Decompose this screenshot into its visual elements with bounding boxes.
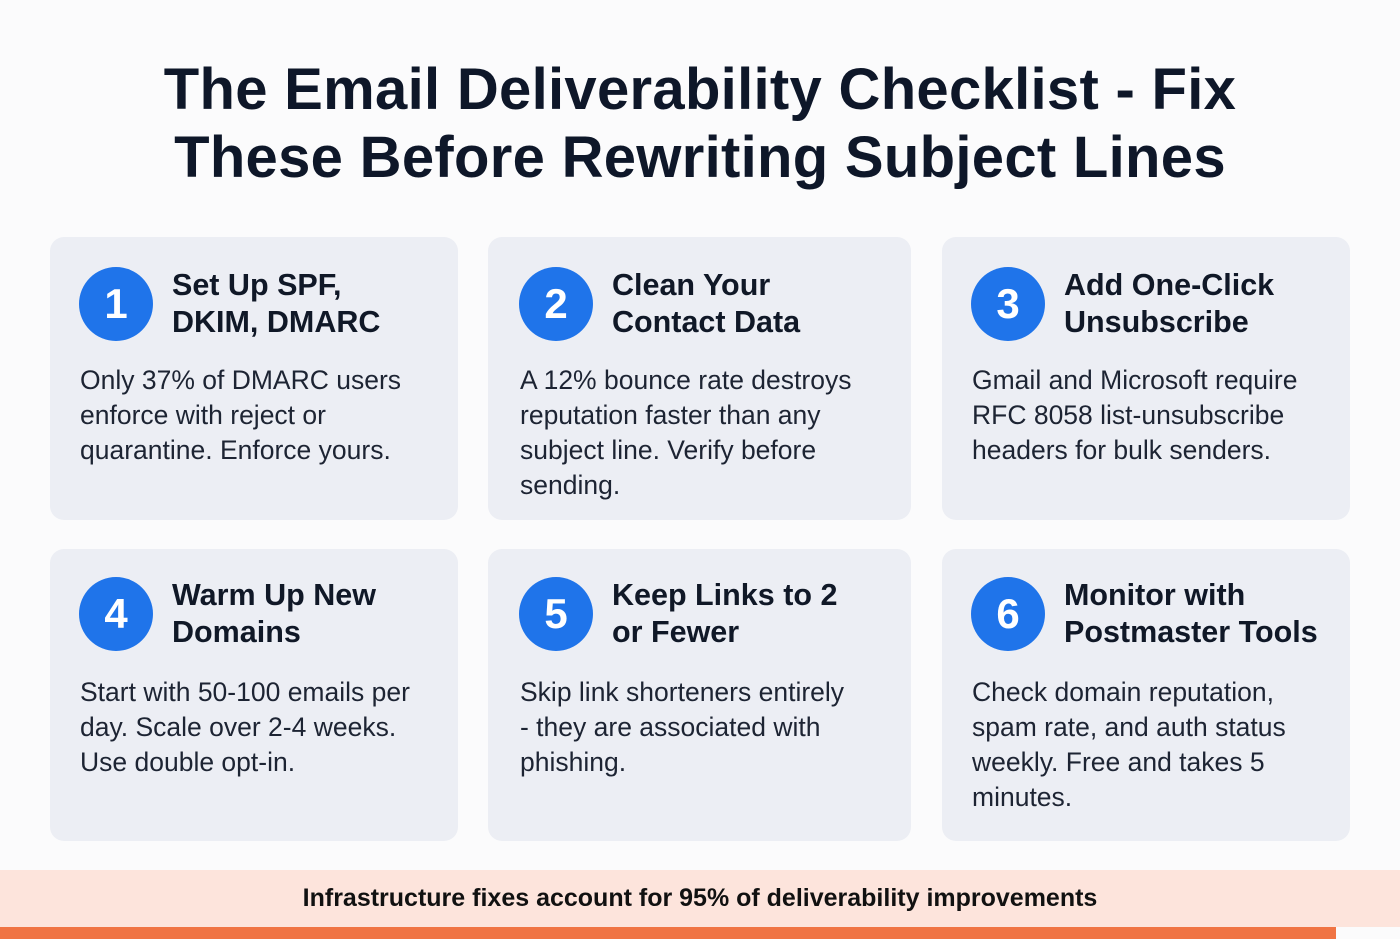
- heading 1: Set Up SPF,: [172, 268, 341, 302]
- heading 6: Monitor with: [1064, 578, 1245, 612]
- text 1: [80, 365, 401, 465]
- heading 2: Clean Your: [612, 268, 770, 302]
- icon: number 1: [79, 267, 153, 341]
- text 4: Start with 50-100 emails per: [80, 677, 410, 707]
- heading 5: [612, 578, 837, 649]
- heading 3: [1064, 268, 1274, 339]
- text 3: RFC 8058 list-unsubscribe: [972, 400, 1284, 430]
- text 3: [972, 365, 1297, 465]
- heading 4: [172, 578, 376, 649]
- heading 4: Warm Up New: [172, 578, 376, 612]
- panel: step 5: [488, 549, 911, 841]
- text 2: reputation faster than any: [520, 400, 821, 430]
- footer callout: Infrastructure fixes account for 95% of deliverability improvements: [303, 884, 1097, 912]
- heading 5: Keep Links to 2: [612, 578, 837, 612]
- footer callout: [0, 870, 1400, 927]
- title: The Email Deliverability Checklist - Fix: [164, 57, 1236, 122]
- heading 6: [1064, 578, 1318, 649]
- icon: number 4: [79, 577, 153, 651]
- heading 2: Contact Data: [612, 305, 800, 339]
- text 4: Use double opt-in.: [80, 747, 295, 777]
- text 4: day. Scale over 2-4 weeks.: [80, 712, 396, 742]
- panel: step 4: [50, 549, 458, 841]
- icon: number 2: 2: [544, 280, 568, 327]
- text 6: [972, 677, 1286, 812]
- text 6: weekly. Free and takes 5: [972, 747, 1265, 777]
- icon: number 6: [971, 577, 1045, 651]
- icon: number 6: 6: [996, 590, 1020, 637]
- icon: number 4: 4: [104, 590, 128, 637]
- text 1: Only 37% of DMARC users: [80, 365, 401, 395]
- text 6: Check domain reputation,: [972, 677, 1274, 707]
- heading 3: Unsubscribe: [1064, 305, 1249, 339]
- title: [164, 57, 1236, 190]
- text 1: enforce with reject or: [80, 400, 326, 430]
- heading 1: [172, 268, 380, 339]
- text 5: - they are associated with: [520, 712, 820, 742]
- text 2: sending.: [520, 470, 620, 500]
- title: These Before Rewriting Subject Lines: [174, 125, 1226, 190]
- text 5: [520, 677, 844, 777]
- text 5: phishing.: [520, 747, 626, 777]
- heading 5: or Fewer: [612, 615, 739, 649]
- text 2: subject line. Verify before: [520, 435, 816, 465]
- panel: step 6: [942, 549, 1350, 841]
- text 1: quarantine. Enforce yours.: [80, 435, 391, 465]
- progress bar: [0, 927, 1336, 939]
- heading 2: [612, 268, 800, 339]
- text 4: [80, 677, 410, 777]
- text 5: Skip link shorteners entirely: [520, 677, 844, 707]
- text 3: Gmail and Microsoft require: [972, 365, 1297, 395]
- heading 6: Postmaster Tools: [1064, 615, 1318, 649]
- text 2: A 12% bounce rate destroys: [520, 365, 851, 395]
- text 3: headers for bulk senders.: [972, 435, 1271, 465]
- panel: step 1: [50, 237, 458, 520]
- panel: step 2: [488, 237, 911, 520]
- heading 4: Domains: [172, 615, 301, 649]
- text 6: spam rate, and auth status: [972, 712, 1286, 742]
- heading 1: DKIM, DMARC: [172, 305, 380, 339]
- heading 3: Add One-Click: [1064, 268, 1274, 302]
- icon: number 1: 1: [104, 280, 128, 327]
- icon: number 3: [971, 267, 1045, 341]
- text 2: [520, 365, 851, 500]
- icon: number 5: [519, 577, 593, 651]
- icon: number 3: 3: [996, 280, 1020, 327]
- panel: step 3: [942, 237, 1350, 520]
- icon: number 5: 5: [544, 590, 568, 637]
- icon: number 2: [519, 267, 593, 341]
- text 6: minutes.: [972, 782, 1072, 812]
